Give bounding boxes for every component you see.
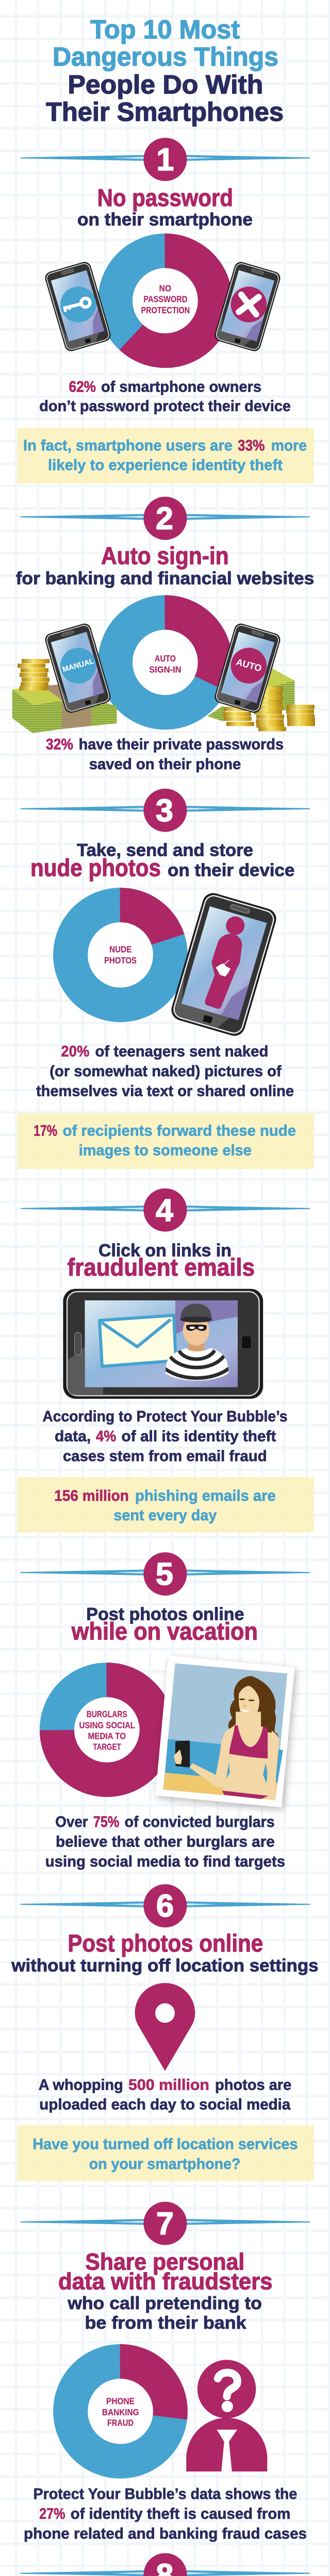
heading 4: fraudulent emails	[68, 1253, 255, 1281]
stat text 20%: of teenagers sent naked	[95, 1043, 268, 1060]
stat text 75%: Over	[55, 1814, 88, 1831]
stat text 4%: 4%	[96, 1428, 116, 1445]
heading 2	[16, 542, 314, 588]
number badge 3	[21, 789, 310, 832]
stat text 4%: data,	[55, 1428, 91, 1445]
number badge 2: 2	[156, 501, 173, 536]
donut chart 75%	[57, 1680, 157, 1780]
stat text 500 million: 500 million	[128, 2076, 209, 2093]
heading 1	[77, 184, 253, 230]
panel: 6 location settings	[11, 1884, 319, 2181]
stat text 32%: saved on their phone	[89, 756, 241, 773]
number badge 5	[21, 1552, 310, 1596]
donut chart 75%: MEDIA TO	[88, 1731, 126, 1741]
heading 3: on their device	[168, 860, 294, 880]
stat text 75%: 75%	[93, 1814, 119, 1831]
number badge 3: 3	[156, 793, 173, 828]
panel: 8 naked smartphone	[21, 2553, 310, 2576]
stat text 27%: Protect Your Bubble’s data shows the	[33, 2486, 297, 2503]
stat text 20%	[36, 1043, 294, 1099]
heading 2: Auto sign-in	[101, 542, 229, 569]
donut chart 62%: PASSWORD	[143, 294, 187, 304]
heading 7: data with fraudsters	[58, 2268, 273, 2294]
icon: phone with figure	[169, 890, 279, 1039]
icon: phone with auto sign-in	[213, 622, 282, 715]
heading 5: while on vacation	[71, 1617, 258, 1645]
number badge 1: 1	[156, 142, 174, 177]
panel: 7 fraudsters	[21, 2202, 310, 2542]
panel: 3 nude photos	[18, 789, 314, 1169]
title	[46, 14, 284, 127]
icon: coins right	[223, 687, 315, 731]
title: Top 10 Most	[90, 14, 240, 44]
stat text 32%	[46, 736, 284, 773]
donut chart 27%: FRAUD	[107, 2418, 134, 2428]
stat text 32%: have their private passwords	[79, 736, 284, 753]
heading 7: Share personal	[85, 2248, 244, 2275]
stat text 4%: cases stem from email fraud	[63, 1448, 267, 1465]
panel: 4 fraudulent emails	[18, 1189, 314, 1533]
stat text 62%: of smartphone owners	[101, 378, 261, 395]
number badge 4: 4	[156, 1193, 173, 1228]
stat text 27%: 27%	[39, 2505, 65, 2522]
heading 1: No password	[97, 184, 233, 211]
stat text 75%: using social media to find targets	[45, 1853, 285, 1870]
donut chart 62%	[116, 251, 215, 351]
icon: envelope	[100, 1315, 176, 1366]
stat text 62%	[39, 378, 291, 415]
title: Dangerous Things	[53, 42, 278, 71]
heading 7: be from their bank	[85, 2313, 246, 2333]
icon: phone with manual sign-in	[43, 622, 112, 715]
heading 2: for banking and financial websites	[16, 569, 314, 588]
icon: phone with cross	[213, 260, 282, 353]
heading 6	[11, 1929, 319, 1975]
heading 3: Take, send and store	[77, 841, 253, 860]
donut chart 75%: BURGLARS	[87, 1709, 127, 1719]
stat text 500 million: uploaded each day to social media	[39, 2096, 291, 2113]
icon: money stack left	[12, 685, 117, 733]
icon: coins left	[18, 659, 50, 690]
number badge 1	[21, 138, 310, 181]
donut chart 20%: PHOTOS	[104, 955, 137, 965]
callout: identity theft	[18, 428, 314, 484]
callout: identity theft: 33%	[238, 437, 265, 454]
stat text 4%: of all its identity theft	[122, 1428, 276, 1445]
icon: thief	[162, 1303, 232, 1381]
callout: phishing emails: 156 million	[54, 1487, 129, 1504]
heading 7	[58, 2248, 273, 2333]
panel: 2 auto sign-in	[12, 497, 315, 773]
donut chart 20%: NUDE	[109, 944, 132, 955]
stat text 4%	[42, 1408, 288, 1465]
stat text 75%	[45, 1814, 285, 1870]
donut chart 32%: SIGN-IN	[149, 664, 182, 674]
number badge 7: 7	[156, 2206, 174, 2241]
number badge 8	[21, 2553, 310, 2576]
stat text 62%: 62%	[69, 378, 96, 395]
callout: identity theft: likely to experience identity theft	[48, 457, 283, 474]
donut chart 75%: TARGET	[93, 1742, 121, 1752]
icon: location pin	[135, 1983, 195, 2071]
number badge 6: 6	[156, 1888, 174, 1923]
heading 4: Click on links in	[98, 1241, 232, 1260]
callout: phishing emails	[18, 1477, 314, 1533]
icon: phone with key	[43, 260, 112, 353]
callout: phishing emails: sent every day	[113, 1507, 217, 1524]
donut chart 32%: AUTO	[155, 653, 176, 664]
donut chart 27%: BANKING	[102, 2407, 139, 2417]
callout: forwarded images: images to someone else	[79, 1142, 252, 1159]
heading 3	[30, 841, 294, 881]
callout: phishing emails: phishing emails are	[135, 1487, 276, 1504]
icon: anonymous caller	[186, 2360, 267, 2471]
donut chart 62%: PROTECTION	[141, 305, 190, 315]
panel: 5 vacation photos	[21, 1552, 310, 1870]
donut chart 27%	[71, 2362, 170, 2461]
callout: location services: on your smartphone?	[89, 2156, 240, 2173]
polaroid photo: woman taking selfie	[155, 1655, 294, 1807]
icon: money stack right	[207, 668, 294, 721]
stat text 20%: 20%	[61, 1043, 89, 1060]
heading 5: Post photos online	[86, 1604, 244, 1624]
title: Their Smartphones	[46, 97, 284, 127]
number badge 7	[21, 2202, 310, 2245]
heading 3: nude photos	[30, 854, 161, 881]
stat text 75%: believe that other burglars are	[56, 1833, 275, 1851]
donut chart 20%	[71, 905, 170, 1005]
heading 7: who call pretending to	[67, 2294, 262, 2313]
callout: forwarded images	[18, 1113, 314, 1169]
heading 1: on their smartphone	[77, 210, 253, 230]
stat text 62%: don’t password protect their device	[39, 398, 291, 415]
heading 4	[68, 1241, 255, 1281]
stat text 500 million: A whopping	[39, 2076, 123, 2093]
stat text 20%: themselves via text or shared online	[36, 1082, 294, 1099]
stat text 75%: of convicted burglars	[125, 1814, 275, 1831]
callout: forwarded images: of recipients forward these nude	[63, 1122, 296, 1140]
stat text 32%: 32%	[46, 736, 73, 753]
callout: forwarded images: 17%	[34, 1122, 57, 1140]
donut chart 75%: USING SOCIAL	[79, 1720, 135, 1730]
number badge 6	[21, 1884, 310, 1927]
stat text 27%: of identity theft is caused from	[71, 2505, 290, 2522]
donut chart 27%: PHONE	[106, 2396, 135, 2406]
callout: identity theft: more	[271, 437, 307, 454]
heading 5	[71, 1604, 258, 1645]
icon: phone with auto sign-in: AUTO	[235, 656, 263, 674]
heading 6: Post photos online	[68, 1929, 263, 1957]
icon: phone with manual sign-in: MANUAL	[61, 657, 95, 674]
panel: 1 no password	[18, 138, 314, 484]
callout: location services	[18, 2125, 314, 2181]
number badge 4	[21, 1189, 310, 1232]
icon: landscape phone with email and thief	[63, 1289, 263, 1399]
heading 6: without turning off location settings	[11, 1956, 319, 1975]
donut chart 32%	[116, 613, 215, 713]
stat text 27%: phone related and banking fraud cases	[24, 2525, 307, 2542]
number badge 5: 5	[156, 1556, 173, 1591]
stat text 4%: According to Protect Your Bubble’s	[42, 1408, 288, 1425]
callout: identity theft: In fact, smartphone users are	[23, 437, 233, 454]
title: People Do With	[68, 70, 263, 99]
stat text 500 million	[39, 2076, 291, 2113]
stat text 500 million: photos are	[215, 2076, 291, 2093]
stat text 27%	[24, 2486, 307, 2542]
callout: location services: Have you turned off location services	[32, 2136, 298, 2153]
number badge 2	[21, 497, 310, 540]
stat text 20%: (or somewhat naked) pictures of	[50, 1063, 282, 1080]
donut chart 62%: NO	[159, 283, 171, 293]
